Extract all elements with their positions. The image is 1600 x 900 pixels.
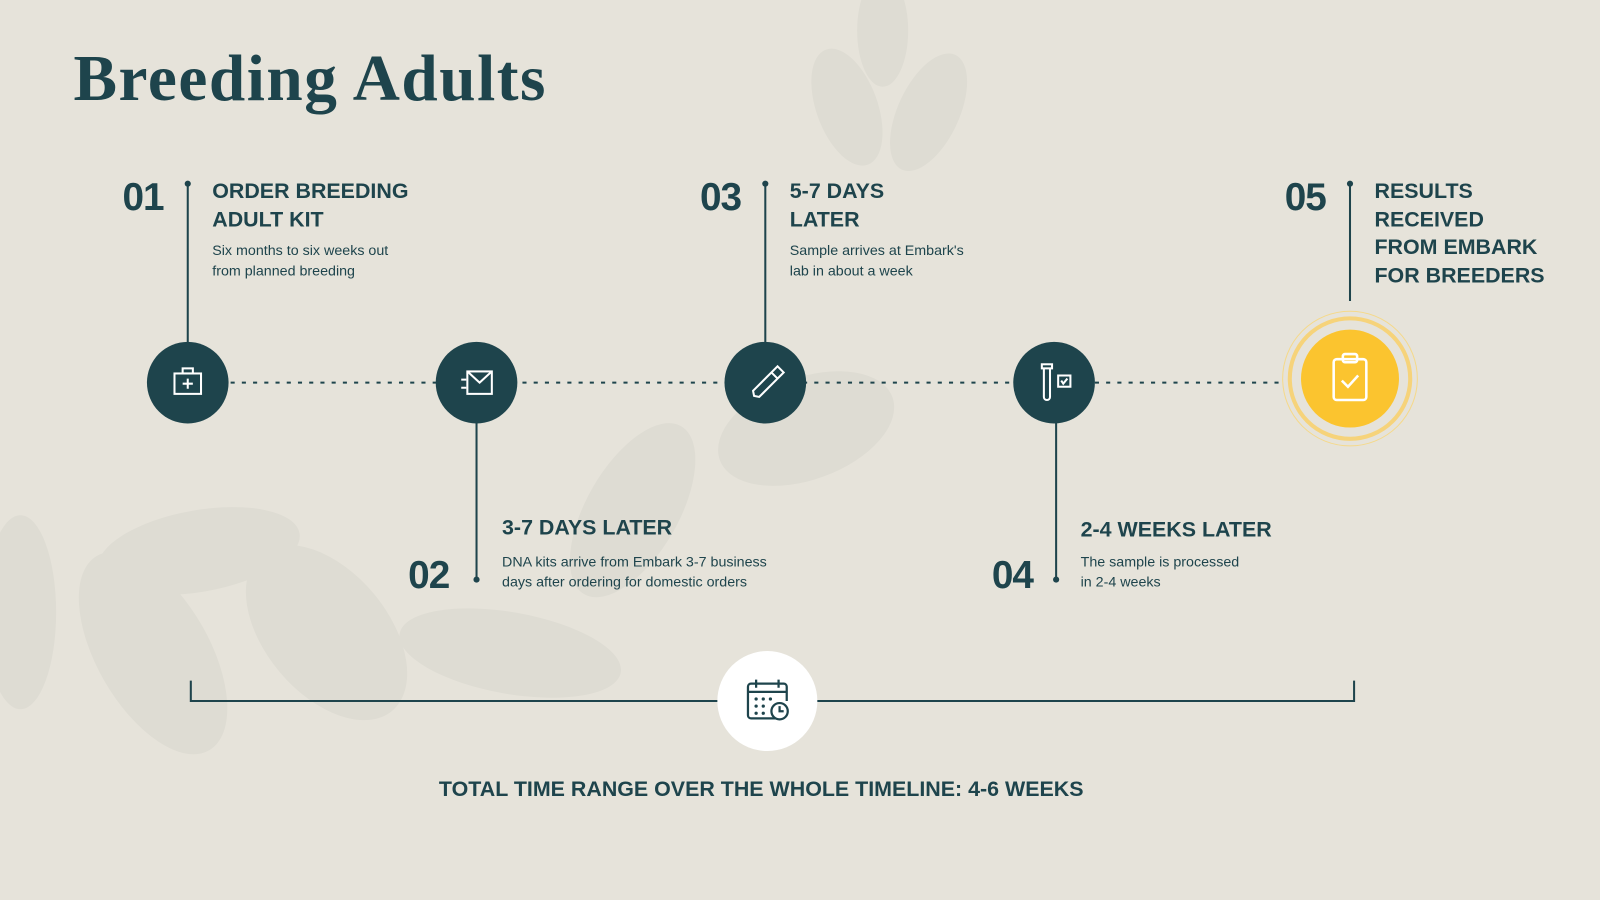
step 04: 2-4 WEEKS LATER	[1081, 518, 1272, 542]
title: Breeding Adults	[73, 43, 547, 115]
step 05: RECEIVED	[1374, 208, 1484, 232]
total bracket	[191, 651, 1354, 751]
step 03	[700, 176, 964, 423]
step 04: in 2-4 weeks	[1081, 575, 1161, 591]
step 03: 03	[700, 176, 742, 219]
step 02: DNA kits arrive from Embark 3-7 business	[502, 554, 767, 570]
step 03: LATER	[790, 208, 860, 232]
step 03: lab in about a week	[790, 264, 914, 280]
step 05	[1283, 176, 1545, 446]
dotted timeline	[231, 382, 1281, 384]
step 01: ORDER BREEDING	[212, 179, 408, 203]
step 02: 3-7 DAYS LATER	[502, 516, 673, 540]
step 01: ADULT KIT	[212, 208, 324, 232]
step 05: 05	[1285, 176, 1326, 219]
step 02: days after ordering for domestic orders	[502, 575, 747, 591]
total text: TOTAL TIME RANGE OVER THE WHOLE TIMELINE: 4-6 WEEKS	[439, 777, 1084, 801]
step 01: from planned breeding	[212, 264, 355, 280]
step 04: 04	[992, 554, 1034, 597]
step 05: RESULTS	[1374, 179, 1473, 203]
step 03: Sample arrives at Embark's	[790, 243, 964, 259]
step 01: 01	[122, 176, 164, 219]
step 02	[408, 342, 767, 597]
step 02: 02	[408, 554, 449, 597]
step 04: The sample is processed	[1081, 554, 1239, 570]
step 01	[122, 176, 408, 423]
step 05: FROM EMBARK	[1374, 235, 1538, 259]
step 05: FOR BREEDERS	[1374, 264, 1545, 288]
step 03: 5-7 DAYS	[790, 179, 884, 203]
step 01: Six months to six weeks out	[212, 243, 388, 259]
step 04	[992, 342, 1272, 597]
